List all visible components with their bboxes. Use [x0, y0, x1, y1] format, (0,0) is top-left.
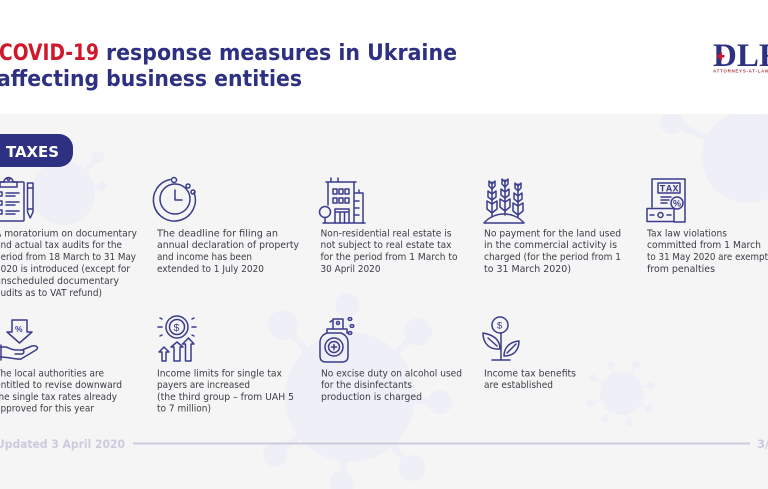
- icon: money plant: $: [497, 320, 503, 332]
- text: land payment: in the commercial activity is: [484, 240, 617, 251]
- icon: clipboard with pencil: [0, 178, 33, 221]
- text: excise duty: No excise duty on alcohol used: [321, 368, 462, 380]
- icon: hand with percent arrow: [0, 320, 37, 360]
- text: real estate: Non-residential real estate is: [320, 228, 452, 240]
- text: excise duty: production is charged: [321, 392, 422, 403]
- icon: coin with rising arrows: [158, 316, 196, 361]
- text: tax law violations: from penalties: [647, 264, 715, 275]
- text: excise duty: for the disinfectants: [321, 380, 412, 391]
- text: land payment: [484, 228, 621, 275]
- icon: tax document: TAX: [660, 184, 678, 196]
- icon: buildings: [320, 178, 365, 223]
- icon: tax document: %: [673, 198, 681, 208]
- title: [0, 41, 457, 92]
- text: excise duty: [321, 368, 462, 403]
- icon: clock: [153, 178, 195, 221]
- text: tax law violations: [646, 228, 768, 275]
- text: real estate: not subject to real estate tax: [320, 240, 452, 251]
- icon: coin with rising arrows: $: [174, 322, 180, 334]
- section label: taxes: [0, 134, 73, 167]
- text: income limits: to 7 million): [157, 404, 211, 414]
- title: COVID-19: [0, 41, 99, 66]
- text: declaration deadline: The deadline for filing an: [156, 228, 278, 240]
- text: tax law violations: committed from 1 March: [647, 240, 761, 251]
- text: audits moratorium: [0, 228, 137, 299]
- title: response measures in Ukraine: [106, 41, 457, 66]
- text: land payment: to 31 March 2020): [484, 264, 571, 275]
- text: income tax benefits: [484, 368, 576, 391]
- text: land payment: charged (for the period from 1: [484, 252, 621, 263]
- text: real estate: for the period from 1 March to: [320, 252, 458, 263]
- text: declaration deadline: annual declaration of property: [157, 240, 299, 251]
- text: real estate: 30 April 2020: [320, 264, 380, 275]
- text: income tax benefits: Income tax benefits: [484, 368, 576, 380]
- text: land payment: No payment for the land used: [484, 228, 621, 240]
- icon: hand with percent arrow: %: [15, 324, 23, 334]
- icon: plants: [484, 179, 524, 223]
- text: declaration deadline: [156, 228, 299, 275]
- text: income limits: (the third group – from UAH 5: [157, 392, 294, 403]
- text: declaration deadline: and income has been: [157, 252, 252, 263]
- text: income tax benefits: are established: [484, 380, 553, 391]
- icon: tax document: [647, 179, 685, 222]
- title: affecting business entities: [0, 67, 302, 92]
- icon: sanitizer spray: [320, 318, 354, 362]
- text: income limits: payers are increased: [157, 380, 250, 391]
- text: income limits: Income limits for single tax: [157, 368, 282, 380]
- background: virus shapes: [31, 110, 768, 489]
- text: income limits: [157, 368, 294, 414]
- section label: taxes: TAXES: [6, 143, 59, 161]
- text: tax law violations: Tax law violations: [646, 228, 727, 240]
- text: local authorities: [0, 368, 122, 414]
- text: real estate: [320, 228, 458, 275]
- text: declaration deadline: extended to 1 July 2020: [157, 264, 264, 275]
- footer: update date: Updated 3 April 2020: [0, 437, 125, 451]
- icon: money plant: [483, 317, 519, 360]
- logo: ATTORNEYS-AT-LAW: [713, 68, 768, 74]
